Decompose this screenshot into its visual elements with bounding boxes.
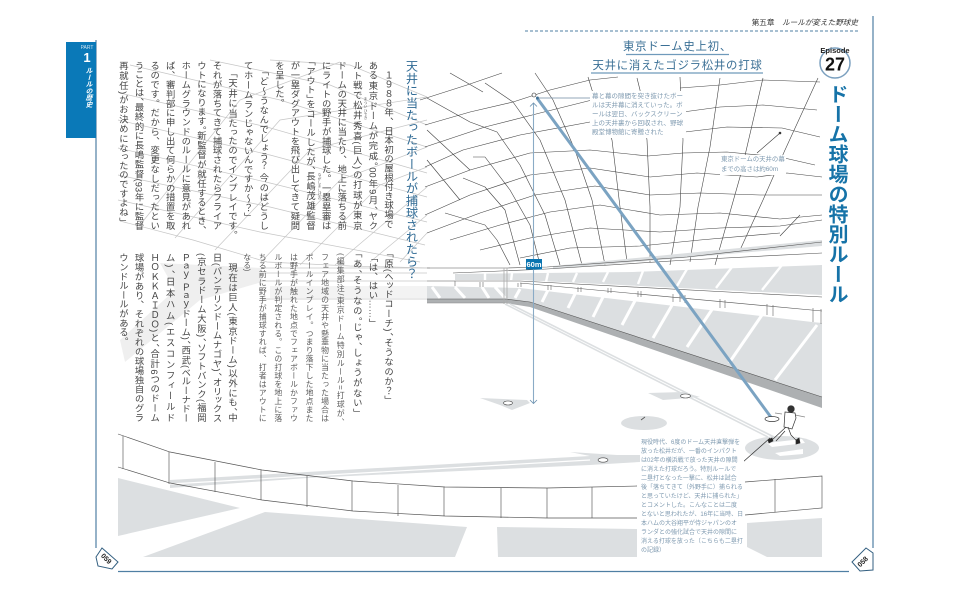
annotation: ball through the roof: 幕と幕の隙間を突き抜けたボー — [592, 93, 683, 100]
body text upper block: うことは、最終的に長嶋監督(93年に監督 — [134, 61, 144, 230]
body text lower block: ルボールが判定される。この打球を地上に落 — [274, 253, 283, 422]
body text lower block: Ｐａｙ Ｐａｙドーム)、西武(ベルーナドー — [180, 253, 190, 422]
main title: ドーム球場の特別ルール — [825, 84, 847, 304]
annotation: ball through the roof — [592, 92, 683, 136]
dome roof grid — [420, 73, 822, 265]
height arrow — [530, 103, 537, 404]
ruby for Nagashima: ながしま しげお — [318, 173, 322, 199]
annotation: roof height: までの高さは約60m — [721, 166, 778, 173]
lower stand seating row — [427, 286, 822, 397]
annotation: Matsui story: の記録） — [641, 548, 665, 554]
annotation: ball through the roof: ルは天井幕に消えていった。ボ — [592, 102, 683, 109]
body text lower block: なる) — [243, 253, 252, 271]
episode badge: Episode — [820, 46, 850, 55]
annotation: roof height: 東京ドームの天井の幕 — [721, 156, 785, 163]
heading underlines — [591, 54, 763, 73]
leader from roof annotation — [757, 132, 781, 153]
body text lower block: は野手が触れた地点でフェアボールかファウ — [289, 253, 298, 422]
part name: ルールの歴史 — [84, 67, 91, 108]
body text lower block — [118, 253, 394, 422]
body text lower block: ウンドルールがある。 — [118, 253, 128, 346]
page frame — [96, 16, 873, 572]
illustration heading: 天井に消えたゴジラ松井の打球 — [592, 60, 762, 72]
white mask behind top annotation — [590, 91, 686, 138]
left foul line — [170, 452, 640, 488]
batter figure — [765, 406, 805, 444]
part label: PART — [81, 45, 93, 51]
part number: 1 — [83, 50, 91, 65]
part tab — [66, 42, 96, 138]
centre pillar — [504, 268, 507, 304]
body text upper block: 「アウト」をコールしたが、長嶋茂雄監督 — [305, 61, 315, 230]
annotation: Matsui story: 本ハムの大谷翔平が侍ジャパンのオ — [641, 521, 737, 527]
ball hole in the roof — [532, 93, 590, 100]
annotation: Matsui story — [640, 437, 744, 557]
body text upper block: ルト戦で松井秀喜(巨人)の打球が東京 — [352, 61, 362, 230]
annotation: roof height — [720, 155, 786, 175]
episode badge — [820, 46, 850, 78]
body text upper block: １９８８年、日本初の屋根付き球場で — [383, 70, 393, 228]
annotation: Matsui story: ランダとの強化試合で天井の隙間に — [641, 530, 737, 536]
body text upper block: 「天井に当たったのでインプレイです。 — [227, 73, 237, 235]
outfield fence — [118, 434, 822, 518]
body text lower block: 現在は巨人(東京ドーム)以外にも、中 — [227, 263, 237, 422]
left page heading: 天井に当たったボールが捕球されたら？ — [404, 60, 418, 280]
body text lower block: (京セラドーム大阪)、ソフトバンク(福岡 — [196, 253, 206, 422]
header dashed rule — [525, 30, 858, 32]
60m label: 60m — [526, 260, 542, 269]
episode badge: 27 — [825, 54, 845, 74]
body text upper block: 「ど〜うなんでしょう？ 今のはどうし — [258, 71, 268, 230]
body text upper block: るのです。だから、変更なしだったとい — [149, 61, 159, 230]
faded dome grid behind left page text — [118, 60, 430, 362]
pitcher's mound — [621, 416, 667, 430]
right foul line — [505, 304, 774, 437]
annotation: Matsui story: に消えた打球だろう。特別ルールで — [641, 467, 736, 473]
body text lower block: ＨＯＫＫＡＩＤＯ)と、合計6つのドーム — [149, 253, 159, 422]
body text upper block: を呈した。 — [274, 61, 284, 108]
foreground grey walls — [118, 478, 822, 557]
annotation: Matsui story: 現役時代、6度のドーム天井直撃弾を — [641, 440, 740, 446]
first base — [648, 392, 700, 400]
body text upper block: ば、審判部に申し出て何らかの措置を取 — [165, 61, 175, 230]
body text upper block: が一塁ダグアウトを飛び出してきて疑問 — [289, 61, 299, 230]
body text lower block: 「あ、そうなの。じゃ、しょうがない」 — [352, 253, 362, 413]
body text upper block: ウトになります。新監督が就任するとき、 — [196, 61, 206, 230]
body text upper block: にライトの野手が捕球した。一塁塁審は — [321, 61, 331, 230]
page number 058 — [852, 548, 873, 571]
annotation: Matsui story: とないと思われたが、16年に当時、日 — [641, 512, 743, 518]
body text upper block: ドームの天井に当たり、地上に落ちる前 — [336, 61, 346, 230]
chapter header: 第五章 ルールが変えた野球史 — [752, 18, 858, 27]
illustration heading: 東京ドーム史上初、 — [623, 41, 732, 53]
body text upper block: それが落ちてきて捕球されたらフライア — [211, 61, 221, 230]
hit ball trajectory — [537, 98, 773, 420]
stand outlines — [427, 242, 822, 397]
page number 059: 059 — [99, 553, 112, 566]
body text lower block: フェア地域の天井や懸垂物に当たった場合は — [321, 253, 330, 422]
illustration heading — [592, 40, 762, 72]
body text lower block: ボールインプレイ。つまり落下した地点また — [305, 253, 314, 422]
annotation: Matsui story: 二塁打となった一撃に、松井は試合 — [641, 476, 737, 482]
annotation: Matsui story: と思っていたけど、天井に捕られた」 — [641, 494, 742, 500]
body text lower block: (編集部注/東京ドーム特別ルール=打球が、 — [336, 253, 345, 422]
annotation: Matsui story: 消える打球を放った（こちらも二塁打 — [641, 539, 743, 545]
home plate circle — [745, 436, 819, 460]
annotation: ball through the roof: 殿堂博物館に寄贈された — [592, 129, 664, 136]
annotation: ball through the roof: 上の天井裏から回収され、野球 — [592, 120, 683, 127]
second base — [480, 398, 530, 410]
outfield wall band — [427, 299, 822, 408]
body text upper block: ある東京ドームが完成。00年9月、ヤク — [367, 61, 377, 230]
body text lower block: ちる前に野手が捕球すれば、打者はアウトに — [258, 253, 267, 422]
annotation: Matsui story: 後「落ちてきて（外野手に）捕られる — [641, 485, 743, 491]
upper stand seating row — [455, 265, 822, 295]
annotation: Matsui story: 放った松井だが、一番のインパクト — [641, 449, 737, 455]
body text lower block: 日(バンテリンドームナゴヤ)、オリックス — [211, 253, 221, 422]
page number 059 — [96, 548, 118, 569]
light wedge above the stands — [553, 240, 822, 269]
leader from batter annotation — [743, 438, 770, 462]
annotation: ball through the roof: ールは翌日、バックスクリーン — [592, 111, 682, 118]
annotation: Matsui story: とコメントした。こんなことは二度 — [641, 503, 737, 509]
body text upper block: ホームグラウンドのルールに意見があれ — [180, 61, 190, 230]
annotation: Matsui story: は02年の横浜戦で放った天井の隙間 — [641, 458, 738, 464]
body text upper block: てホームランじゃないんですか〜？」 — [243, 61, 253, 217]
body text lower block: ム)、日本ハム(エスコンフィールド — [165, 253, 175, 422]
body text lower block: 球場があり、それぞれの球場独自のグラ — [134, 253, 144, 422]
body text lower block: 「は、はい……」 — [367, 253, 377, 327]
page number 058: 058 — [857, 556, 870, 569]
body text lower block: 「原(ヘッドコーチ)、そうなのか？」 — [383, 253, 393, 400]
body text upper block: 再就任)がお決めになったのですよね」 — [118, 61, 128, 222]
body text upper block — [118, 61, 394, 235]
ruby for Matsui: まつい ひでき — [364, 97, 368, 120]
